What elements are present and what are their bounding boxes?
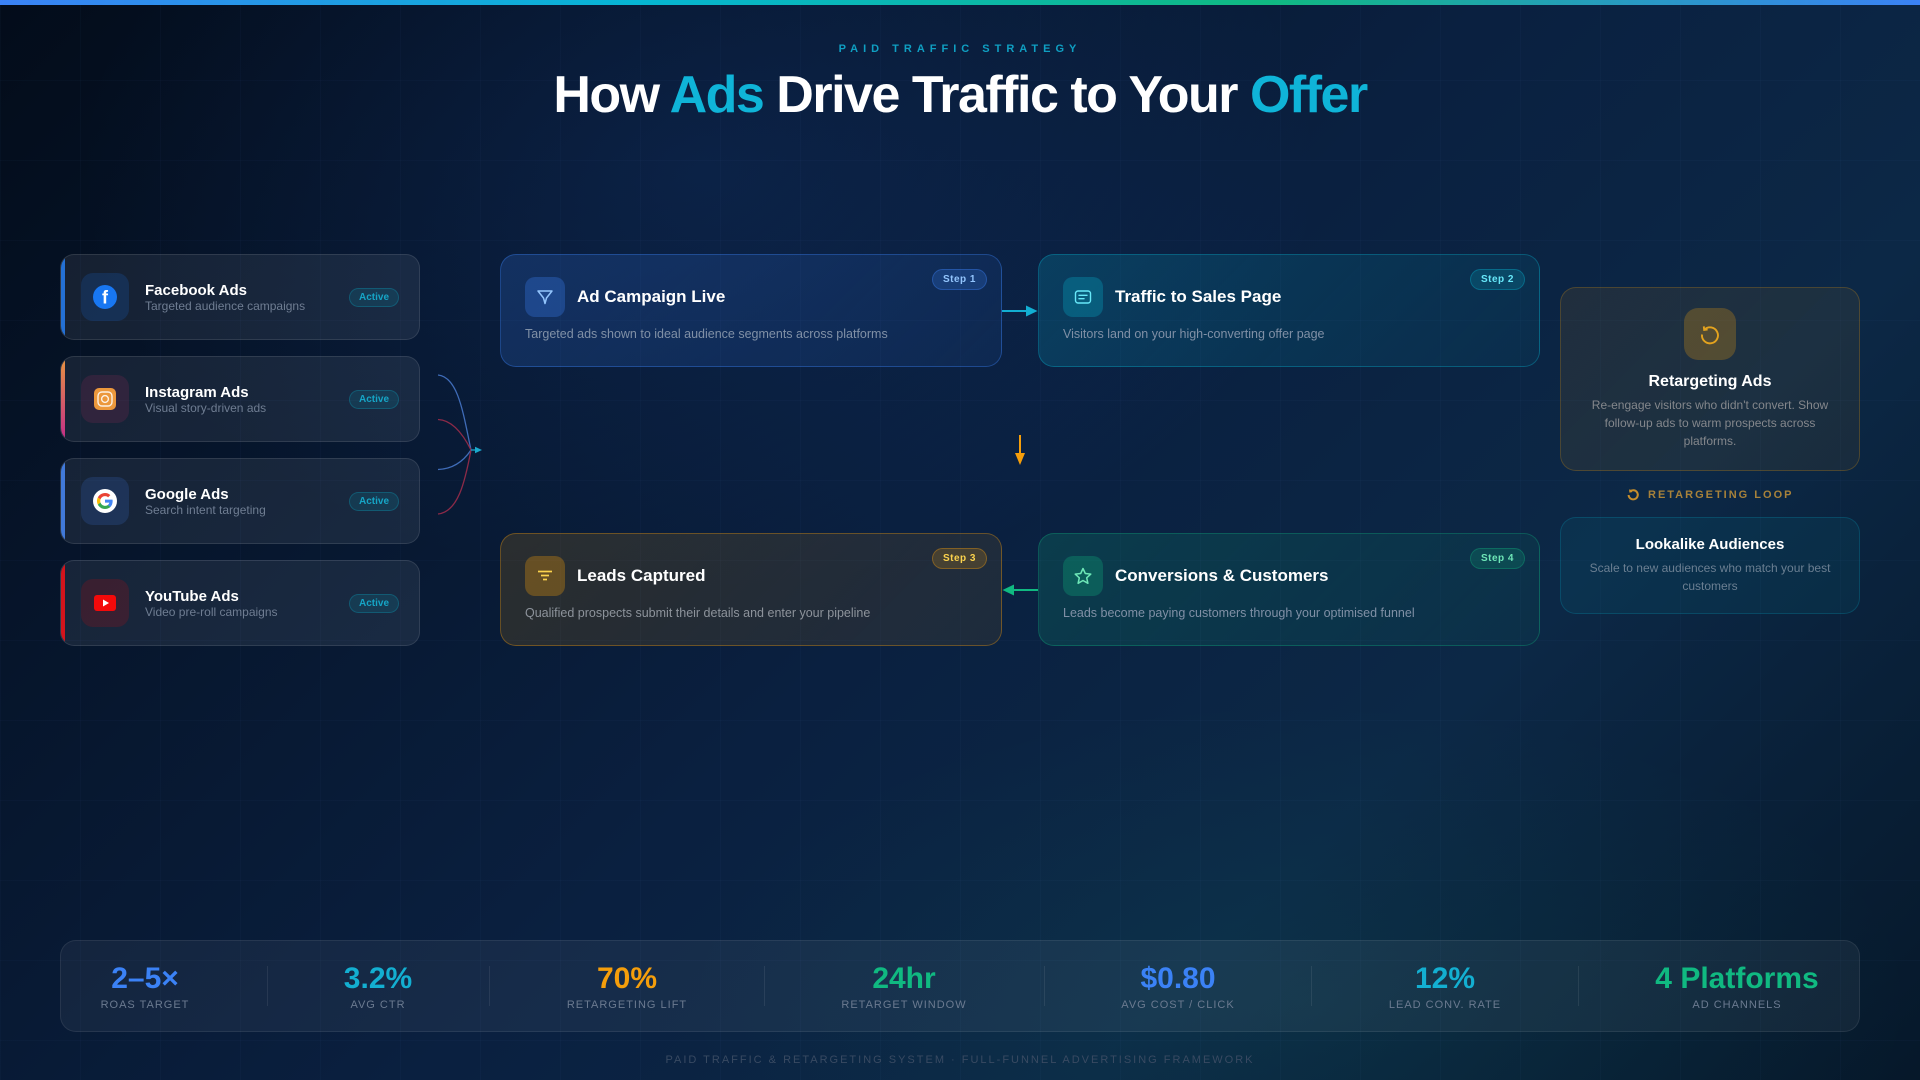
panel: lookalike audiences	[1560, 517, 1860, 614]
stat: ROAS target	[101, 962, 189, 1011]
stat: ad channels: 4 Platforms	[1655, 962, 1819, 995]
platform card: Google Ads: Active	[359, 496, 389, 507]
platform card: Google Ads: Google Ads	[145, 486, 229, 503]
stat: lead conversion rate: 12%	[1415, 962, 1475, 995]
platform card: Google Ads: Search intent targeting	[145, 503, 266, 517]
icon: funnel	[525, 277, 565, 317]
icon: page	[1063, 277, 1103, 317]
stat: average CTR: AVG CTR	[350, 999, 406, 1011]
stat: retarget window: 24hr	[872, 962, 936, 995]
icon: Instagram	[81, 375, 129, 423]
icon: small loop	[1628, 489, 1639, 500]
platform card: YouTube Ads: YouTube Ads	[145, 588, 239, 605]
platform card: Facebook Ads: Facebook Ads	[145, 282, 247, 299]
icon: Facebook: f	[102, 288, 109, 308]
platform card: Facebook Ads: Targeted audience campaigns	[145, 299, 305, 313]
step card: Conversions & Customers: Step 4	[1481, 553, 1514, 564]
step card: Ad Campaign Live	[500, 254, 1002, 367]
icon: Facebook	[81, 273, 129, 321]
step card: Traffic to Sales Page: Visitors land on your high-converting offer page	[1063, 327, 1325, 341]
platform card: Instagram Ads: Visual story-driven ads	[145, 401, 266, 415]
step card: Traffic to Sales Page: Traffic to Sales Page	[1115, 287, 1281, 306]
step card: Leads Captured	[500, 533, 1002, 646]
icon: retarget loop	[1684, 308, 1736, 360]
stat: average CTR: 3.2%	[344, 962, 412, 995]
step card: Ad Campaign Live: Step 1	[943, 274, 976, 285]
platform card: YouTube Ads: Active	[359, 598, 389, 609]
stats bar	[60, 940, 1860, 1032]
step card: Ad Campaign Live: Targeted ads shown to ideal audience segments across platforms	[525, 327, 888, 341]
panel: lookalike audiences: Scale to new audiences who match your best customers	[1590, 561, 1830, 593]
platform card: YouTube Ads	[60, 560, 420, 646]
stat: ROAS target: ROAS TARGET	[101, 999, 189, 1011]
icon: filter lines	[525, 556, 565, 596]
step card: Conversions & Customers: Conversions & Customers	[1115, 566, 1328, 585]
step card: Traffic to Sales Page: Step 2	[1481, 274, 1514, 285]
top gradient bar	[0, 0, 1920, 5]
step card: Traffic to Sales Page	[1038, 254, 1540, 367]
footer: PAID TRAFFIC & RETARGETING SYSTEM · FULL-FUNNEL ADVERTISING FRAMEWORK	[665, 1054, 1255, 1066]
arrow: step 4 to step 3	[1002, 584, 1038, 596]
platform card: YouTube Ads: Video pre-roll campaigns	[145, 605, 278, 619]
stat: retargeting lift: RETARGETING LIFT	[567, 999, 687, 1011]
icon: YouTube	[81, 579, 129, 627]
eyebrow label: PAID TRAFFIC STRATEGY	[839, 43, 1081, 55]
panel: retargeting ads	[1560, 287, 1860, 471]
stat: ROAS target: 2–5×	[111, 962, 179, 995]
stat: retargeting lift	[567, 962, 687, 1011]
platform card: Instagram Ads	[60, 356, 420, 442]
stat: average CTR	[344, 962, 412, 1011]
stat: average cost per click: AVG COST / CLICK	[1121, 999, 1235, 1011]
stat: lead conversion rate: LEAD CONV. RATE	[1389, 999, 1501, 1011]
stat: ad channels	[1655, 962, 1819, 1011]
stat: average cost per click: $0.80	[1140, 962, 1216, 995]
stat: retarget window: RETARGET WINDOW	[841, 999, 967, 1011]
step card: Leads Captured: Step 3	[943, 553, 976, 564]
stat: average cost per click	[1121, 962, 1235, 1011]
platform card: Facebook Ads	[60, 254, 420, 340]
stat: ad channels: AD CHANNELS	[1692, 999, 1782, 1011]
icon: Google	[81, 477, 129, 525]
step card: Conversions & Customers: Leads become paying customers through your optimised funnel	[1063, 606, 1415, 620]
retargeting loop label: RETARGETING LOOP	[1648, 489, 1793, 501]
platform card: Facebook Ads: Active	[359, 292, 389, 303]
platform card: Google Ads	[60, 458, 420, 544]
step card: Conversions & Customers	[1038, 533, 1540, 646]
panel: retargeting ads: Retargeting Ads	[1648, 373, 1771, 390]
stat: retargeting lift: 70%	[597, 962, 657, 995]
arrow: step 1 to step 2	[1002, 306, 1038, 316]
icon: star	[1063, 556, 1103, 596]
connector curves: platforms to campaign	[438, 374, 482, 515]
step card: Ad Campaign Live: Ad Campaign Live	[577, 287, 725, 306]
platform card: Instagram Ads: Active	[359, 394, 389, 405]
arrow: step 2 to step 3	[1015, 435, 1025, 465]
stat: lead conversion rate	[1389, 962, 1501, 1011]
panel: lookalike audiences: Lookalike Audiences	[1636, 536, 1784, 553]
step card: Leads Captured: Leads Captured	[577, 566, 705, 585]
step card: Leads Captured: Qualified prospects submit their details and enter your pipeline	[525, 606, 870, 620]
stat: retarget window	[841, 962, 967, 1011]
platform card: Instagram Ads: Instagram Ads	[145, 384, 249, 401]
panel: ad platforms	[60, 254, 420, 646]
panel: retargeting ads: Re-engage visitors who didn't convert. Show follow-up ads to warm prospects across platforms.	[1592, 398, 1828, 448]
title: How Ads Drive Traffic to Your Offer	[553, 66, 1367, 124]
